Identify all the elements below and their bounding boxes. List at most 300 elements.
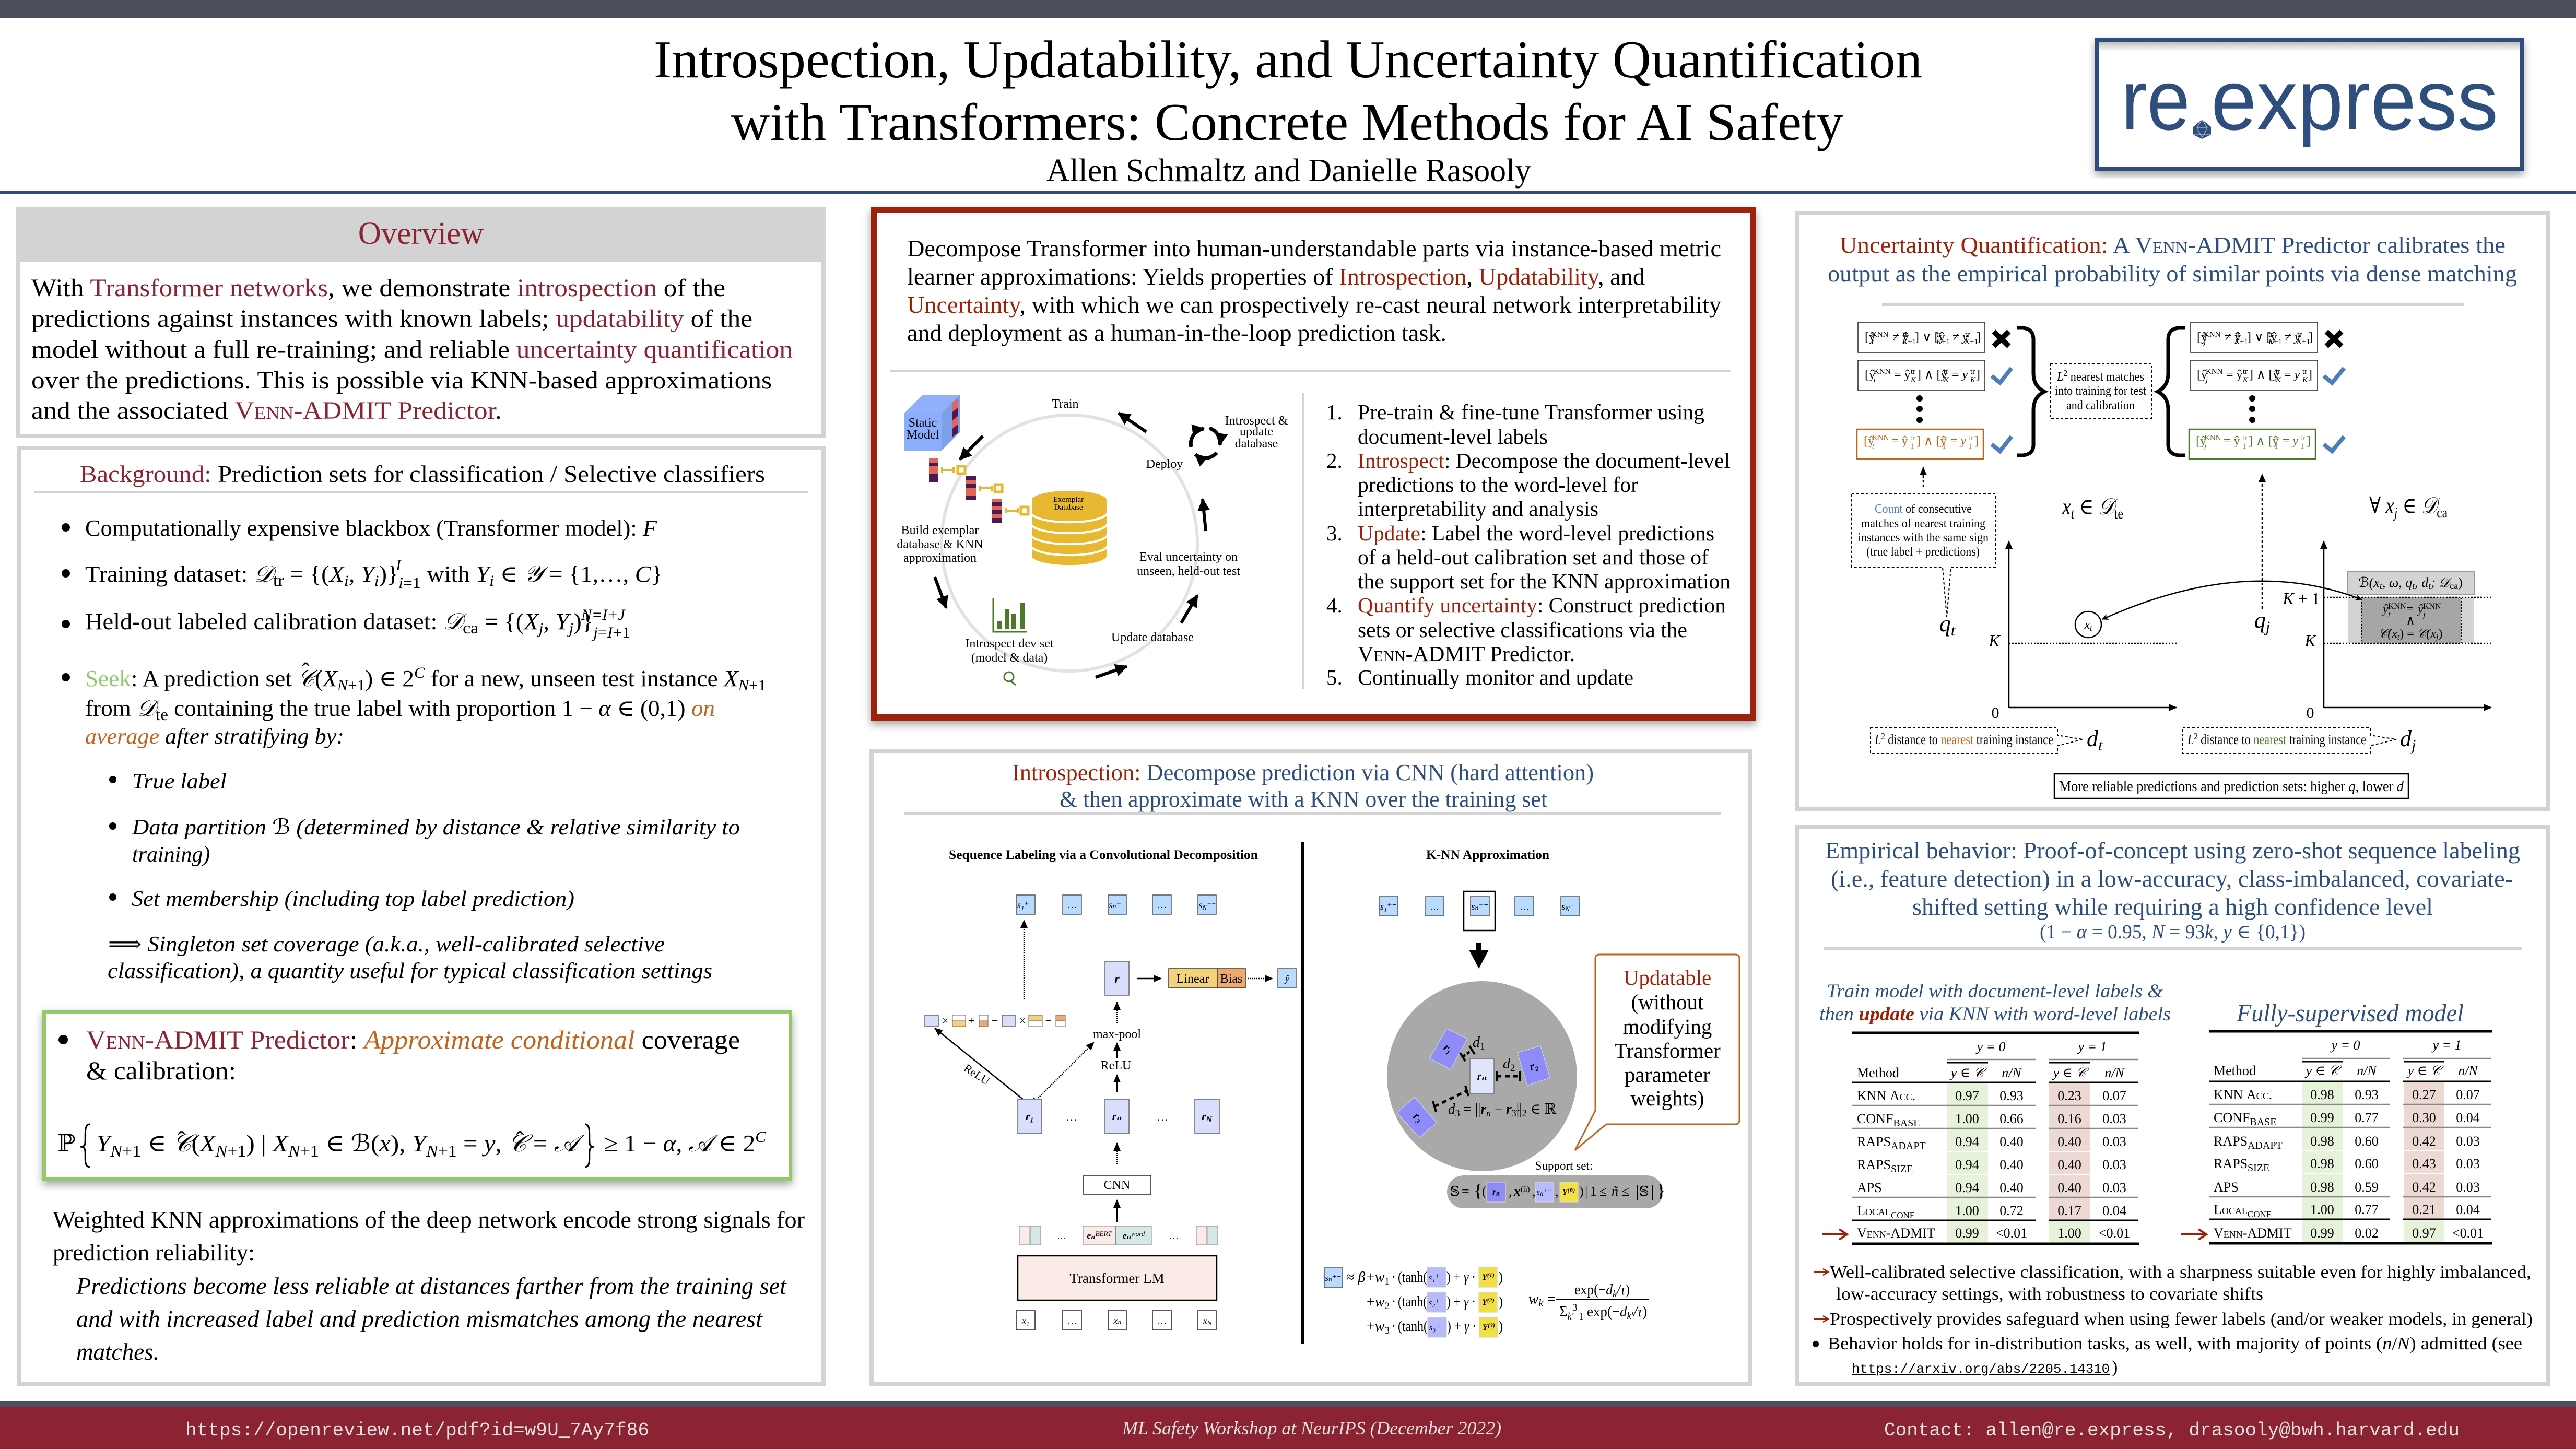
table: fully supervised: 0.43: [2412, 1156, 2436, 1171]
approximation equation: (2): [1487, 1297, 1495, 1304]
background bullets: = {(: [284, 561, 330, 587]
numbered list: of a held-out calibration set and those of: [1358, 545, 1709, 569]
partition conditions: 𝒞(x: [2379, 627, 2397, 641]
calibration-side match boxes: 1: [2274, 442, 2278, 451]
table: document-level: 0.23: [2057, 1088, 2081, 1103]
hidden representations: rₙ: [1112, 1110, 1122, 1123]
test-side match boxes: tr: [1965, 331, 1970, 339]
right chart: K: [2304, 631, 2316, 650]
arrows: [935, 920, 1273, 1222]
empirical heading: (i.e., feature detection) in a low-accuracy, class-imbalanced, covariate-: [1831, 865, 2513, 892]
table: fully supervised: y = 1: [2431, 1038, 2462, 1053]
arrow: left table highlight: [1822, 1229, 1847, 1240]
test-side match boxes: tr: [1910, 434, 1915, 442]
output scores: [1016, 895, 1216, 914]
embeddings: [1019, 1226, 1218, 1245]
distance note right: j: [2409, 737, 2416, 754]
formula: ≥ 1 − α, 𝒜 ∈ 2: [604, 1130, 754, 1157]
support set formula: 1: [1590, 1184, 1597, 1199]
background bullets: Y: [476, 561, 492, 587]
table: fully supervised: 0.60: [2355, 1156, 2379, 1171]
numbered list: Update: Label the word-level predictions: [1358, 521, 1714, 545]
approximation equation: (tanh(: [1398, 1294, 1427, 1310]
summary text: Decompose Transformer into human-understandable parts via instance-based metric: [907, 235, 1721, 262]
cycle labels: Introspect &: [1225, 414, 1288, 428]
weight formula: d: [1620, 1303, 1627, 1320]
background bullets: α ∈ (0,1) on: [598, 696, 714, 721]
callout: updatable: modifying: [1623, 1015, 1712, 1039]
calibration-side match boxes: ] ∨ [ŷ: [2247, 331, 2277, 344]
uncertainty heading: [1828, 232, 2517, 287]
output scores: …: [1067, 900, 1077, 910]
test-side match boxes: ≠: [1949, 331, 1962, 344]
summary text: learner approximations: Yields properties of Introspection, Updatability, and: [907, 263, 1645, 290]
approximation equation: +w: [1367, 1269, 1384, 1286]
cycle labels: database: [1235, 437, 1278, 451]
table: document-level: 0.17: [2057, 1203, 2081, 1218]
empirical heading: Empirical behavior: Proof-of-concept using zero-shot sequence labeling: [1825, 837, 2520, 864]
numbered list: Pre-train & fine-tune Transformer using: [1358, 400, 1704, 424]
KNN reliability text: prediction reliability:: [53, 1239, 255, 1266]
distance labels: r: [1480, 1101, 1487, 1117]
table: document-level: <0.01: [2099, 1226, 2130, 1241]
right table subtitle: Fully-supervised model: [2236, 999, 2464, 1027]
calibration-side match boxes: tr: [2268, 331, 2273, 339]
approximation equation: ·: [1391, 1269, 1396, 1286]
decomposition terms: −: [1045, 1014, 1052, 1027]
calibration-side match boxes: KNN: [2204, 434, 2221, 442]
approximation equation: Y: [1483, 1323, 1488, 1332]
hidden representations: r: [1202, 1110, 1206, 1123]
table: document-level: SIZE: [1891, 1163, 1913, 1175]
distance note right: d: [2400, 726, 2412, 751]
distance note left: 2: [1881, 731, 1885, 741]
introspection heading: & then approximate with a KNN over the training set: [1060, 786, 1547, 812]
formula: 𝒞(X: [173, 1130, 215, 1157]
callout: updatable: (without: [1631, 990, 1704, 1014]
icon: exemplar database: Database: [1054, 503, 1083, 512]
table: fully supervised: Venn-ADMIT: [2214, 1226, 2292, 1241]
cycle labels: Update database: [1111, 631, 1194, 644]
hidden representations: N: [1205, 1115, 1213, 1124]
formula: ˆ: [516, 1126, 524, 1153]
table: fully supervised: APS: [2214, 1180, 2239, 1195]
sub-bullets: True label: [132, 770, 227, 794]
numbered list: 4.: [1326, 593, 1343, 617]
table: fully supervised: RAPS: [2214, 1134, 2248, 1149]
approximation equation: sₙ⁺⁻: [1325, 1273, 1342, 1283]
partition box: ℬ(x: [2358, 575, 2380, 590]
distance labels: 2: [1522, 1108, 1527, 1119]
L2 matches note: 2: [2063, 368, 2067, 378]
partition box: t: [2380, 581, 2383, 591]
cycle labels: update: [1240, 425, 1273, 439]
table: fully supervised: 0.03: [2456, 1156, 2480, 1171]
support set formula: |: [1636, 1182, 1639, 1200]
table: fully supervised: ADAPT: [2248, 1140, 2283, 1151]
support set formula: ): [1579, 1184, 1584, 1199]
background bullets: )}: [573, 609, 593, 634]
embeddings: …: [1169, 1230, 1179, 1241]
weight formula: Σ: [1559, 1303, 1568, 1320]
ReLU arrow label: ReLU: [961, 1061, 992, 1088]
test-side match boxes: [1857, 322, 1985, 459]
distance labels: = ||: [1460, 1101, 1480, 1117]
table: fully supervised: 0.98: [2310, 1156, 2334, 1171]
table: fully supervised: 0.77: [2355, 1202, 2379, 1217]
table: document-level: y = 0: [1975, 1039, 2006, 1054]
calibration-side match boxes: ]: [2308, 368, 2312, 382]
distance labels: −: [1491, 1101, 1506, 1117]
cycle labels: unseen, held-out test: [1137, 564, 1240, 578]
background bullets: Seek: A prediction set 𝒞(X: [85, 666, 337, 691]
background bullets: ,: [543, 609, 556, 634]
calibration-side match boxes: ]: [2309, 331, 2313, 344]
left chart: 0: [1992, 704, 1999, 722]
calibration-side match boxes: K: [2302, 376, 2308, 384]
header: [654, 30, 2522, 189]
table: fully supervised: 0.04: [2456, 1202, 2480, 1217]
test-side match boxes: =: [1952, 368, 1962, 382]
table: fully supervised: 0.93: [2355, 1087, 2379, 1102]
q and domain labels: j: [2264, 618, 2270, 635]
linear and bias: [1114, 969, 1245, 988]
formula: ) |: [246, 1130, 273, 1157]
numbered list: Quantify uncertainty: Construct prediction: [1358, 593, 1726, 617]
calibration-side match boxes: K: [2296, 338, 2302, 346]
calibration-side match boxes: tr: [2300, 434, 2305, 442]
table: fully supervised: 0.21: [2412, 1202, 2436, 1217]
icon: magnifier: [1004, 672, 1016, 685]
calibration-side match boxes: j: [2205, 376, 2208, 384]
test-side match boxes: ]: [1977, 331, 1981, 344]
table: fully supervised: y = 0: [2330, 1038, 2360, 1053]
test-side match boxes: [ŷ: [1864, 434, 1874, 448]
score row: N: [1565, 905, 1570, 913]
overview heading: Overview: [358, 216, 484, 251]
support set formula: ,: [1532, 1184, 1535, 1199]
cycle labels: Introspect dev set: [965, 637, 1054, 651]
approximation equation: (tanh(: [1398, 1318, 1428, 1335]
background bullets: from 𝒟: [85, 696, 155, 721]
table: fully supervised: 0.02: [2355, 1226, 2379, 1241]
panel: empirical behavior: [1797, 827, 2548, 1384]
calibration-side match boxes: =: [2283, 434, 2293, 448]
top bar: [0, 0, 2576, 18]
background bullets: tr: [273, 571, 284, 590]
test-side match boxes: KNN: [1872, 434, 1889, 442]
table: fully supervised: BASE: [2250, 1116, 2276, 1128]
CNN box: CNN: [1104, 1179, 1130, 1192]
distance note right: L: [2187, 732, 2194, 747]
panel: uncertainty quantification: [1797, 213, 2548, 809]
table: document-level: n/N: [2104, 1065, 2125, 1080]
support set label: Support set:: [1535, 1159, 1593, 1172]
KNN reliability text: Predictions become less reliable at distances farther from the training set: [76, 1273, 787, 1299]
formula: +1: [438, 1141, 457, 1160]
icons: cross marks and checks: [1992, 332, 2344, 451]
count note: matches of nearest training: [1861, 517, 1985, 531]
background bullets: for a new, unseen test instance: [425, 666, 724, 691]
table: document-level: 0.03: [2102, 1180, 2126, 1195]
q and domain labels: ca: [2437, 505, 2448, 521]
support set formula: Y: [1562, 1188, 1568, 1197]
partition conditions: ∧: [2406, 614, 2415, 628]
calibration-side match boxes: [2189, 322, 2318, 459]
icon: static model cube: [904, 395, 960, 451]
left table subtitle: [1819, 981, 2171, 1025]
overview text: over the predictions. This is possible via KNN-based approximations: [31, 367, 772, 394]
approximation equation: 1: [1384, 1276, 1390, 1287]
score row: +−: [1570, 901, 1579, 909]
background bullets: +1: [348, 677, 365, 694]
cycle labels: Train: [1052, 397, 1079, 411]
table: document-level: 0.40: [1999, 1157, 2024, 1172]
representation r_n: rₙ: [1477, 1069, 1487, 1082]
L2 matches note: into training for test: [2055, 384, 2146, 398]
q and domain labels: te: [2114, 506, 2123, 522]
introspection heading: [1012, 760, 1594, 812]
partition conditions: j: [2435, 633, 2439, 642]
table: document-level: 0.94: [1955, 1180, 1979, 1195]
numbered list: Continually monitor and update: [1358, 665, 1633, 689]
count note: (true label + predictions): [1866, 545, 1980, 559]
output scores: s₁⁺⁻: [1017, 900, 1034, 910]
calibration-side match boxes: ] ∧ [ŷ: [2249, 434, 2279, 448]
linear and bias: Linear: [1177, 972, 1209, 986]
calibration-side match boxes: tr: [2276, 368, 2280, 376]
distance labels: r: [1506, 1101, 1512, 1117]
distance note left: distance to: [1885, 732, 1940, 747]
table: fully supervised: 0.42: [2412, 1180, 2436, 1195]
calibration-side match boxes: y: [2293, 368, 2300, 382]
findings bullets: https://arxiv.org/abs/2205.14310: [1852, 1361, 2110, 1377]
icon: refresh cycle: [1191, 428, 1220, 458]
table: document-level: 0.40: [1999, 1134, 2024, 1149]
table: fully supervised: y ∈ 𝒞: [2304, 1063, 2342, 1078]
q and domain labels: t: [2071, 506, 2075, 522]
callout: updatable: Updatable: [1624, 965, 1711, 989]
approximation equation: s₃⁺⁻: [1429, 1323, 1445, 1333]
summary text: Uncertainty, with which we can prospectively re-cast neural network interpretability: [907, 291, 1721, 318]
L2 matches note: L: [2056, 370, 2063, 384]
overview text: and the associated Venn-ADMIT Predictor .: [31, 397, 502, 425]
test-side match boxes: t: [1872, 442, 1875, 451]
introspection heading: Introspection: Decompose prediction via CNN (hard attention): [1012, 760, 1594, 785]
L2 matches note: [2050, 363, 2151, 418]
table: fully supervised: y ∈ 𝒞: [2406, 1063, 2444, 1078]
test-side match boxes: K: [1936, 338, 1942, 346]
test-side match boxes: +1: [1970, 338, 1978, 346]
y-hat box: [1278, 969, 1296, 988]
calibration-side match boxes: KNN: [2204, 331, 2221, 339]
test-side match boxes: 1: [1910, 442, 1914, 451]
support set formula: (ñ): [1521, 1185, 1530, 1194]
weight formula: /τ: [1632, 1303, 1643, 1320]
calibration-side match boxes: ≠: [2281, 331, 2295, 344]
header rule: [0, 191, 2576, 194]
partition box: t: [2428, 581, 2431, 591]
approximation equation: ) + γ ·: [1446, 1294, 1476, 1310]
distance labels: n: [1486, 1108, 1491, 1119]
q and domain labels: q: [2254, 607, 2266, 633]
test-side match boxes: [ŷ: [1865, 331, 1875, 344]
cycle labels: Build exemplar: [901, 524, 979, 537]
approximation equation: s₂⁺⁻: [1429, 1298, 1444, 1307]
heading rule: [904, 812, 1721, 815]
support set circle: [1387, 981, 1577, 1171]
distance labels: 2: [1510, 1063, 1515, 1074]
background bullets: )}: [379, 561, 398, 587]
table: document-level: 0.72: [1999, 1203, 2024, 1218]
table: document-level: Local: [1857, 1203, 1891, 1218]
table: document-level: 0.16: [2057, 1111, 2081, 1126]
table: document-level: RAPS: [1857, 1157, 1891, 1172]
calibration-side match boxes: ] ∧ [ŷ: [2249, 368, 2279, 382]
table: document-level: Method: [1857, 1065, 1899, 1080]
test-side match boxes: KNN: [1872, 331, 1889, 339]
callout: Venn-ADMIT predictor: & calibration:: [86, 1056, 236, 1085]
calibration-side match boxes: j: [2203, 338, 2206, 346]
left chart: K: [1988, 631, 2001, 650]
numbered list: the support set for the KNN approximation: [1358, 569, 1731, 593]
overview text: predictions against instances with known labels; updatability of the: [31, 305, 752, 333]
table: document-level: 0.03: [2102, 1157, 2126, 1172]
approximation equation: ·: [1391, 1318, 1396, 1335]
table: document-level: y = 1: [2076, 1039, 2107, 1054]
numbered list: 5.: [1326, 665, 1343, 689]
callout: updatable: [1575, 955, 1739, 1150]
overview header band: [16, 207, 826, 262]
distance labels: d: [1473, 1034, 1480, 1051]
support set formula: ñ: [1612, 1184, 1618, 1199]
formula: X: [272, 1130, 289, 1157]
table: fully supervised: Method: [2214, 1063, 2256, 1078]
authors: Allen Schmaltz and Danielle Rasooly: [1046, 153, 1531, 189]
calibration-side match boxes: [ŷ: [2197, 368, 2207, 382]
formula: y, 𝒞 = 𝒜: [484, 1130, 577, 1157]
embeddings: eₙ: [1087, 1230, 1096, 1241]
output scores: +−: [1207, 900, 1216, 908]
background bullets: ca: [463, 618, 478, 637]
input tokens: x: [1203, 1315, 1207, 1326]
right chart: 0: [2306, 704, 2314, 722]
support set formula: x: [1513, 1184, 1521, 1199]
panel: introspection: [872, 751, 1750, 1384]
table: document-level: APS: [1857, 1180, 1882, 1195]
calibration-side match boxes: K: [2234, 338, 2240, 346]
cycle labels: [897, 397, 1288, 665]
diagram: KNN approximation: [1324, 848, 1739, 1337]
logo: re.express: express: [2211, 52, 2498, 148]
embeddings: eₙ: [1123, 1230, 1131, 1241]
partition conditions: ŷ: [2383, 603, 2389, 616]
input tokens: N: [1207, 1319, 1213, 1327]
input tokens: [1016, 1311, 1216, 1330]
test point: t: [2090, 624, 2092, 633]
icon: static model cube: Model: [907, 428, 939, 442]
r box: [1105, 961, 1129, 995]
support set formula: s: [1537, 1188, 1540, 1197]
approximation equation: (tanh(: [1398, 1269, 1427, 1286]
background bullets: Y: [556, 609, 571, 634]
test point: [2075, 611, 2101, 638]
test-side match boxes: ]: [1974, 434, 1979, 448]
partition conditions: KNN: [2388, 602, 2406, 611]
distance labels: ||: [1516, 1101, 1522, 1117]
linear and bias: Bias: [1220, 972, 1242, 986]
calibration-side match boxes: y: [2293, 331, 2300, 344]
formula: +1: [300, 1141, 319, 1160]
formula: ℬ(x), Y: [350, 1130, 425, 1157]
table: document-level: 0.40: [2057, 1157, 2081, 1172]
table: fully supervised: 0.07: [2456, 1087, 2480, 1102]
table: document-level: n/N: [2002, 1065, 2022, 1080]
background bullets: C: [414, 664, 426, 681]
partition conditions: j: [2422, 610, 2426, 619]
formula: Y: [96, 1130, 113, 1157]
table: document-level: 1.00: [1955, 1203, 1979, 1218]
table: document-level: [1852, 1033, 2139, 1244]
distance note left: L: [1874, 732, 1881, 747]
table: fully supervised: 0.97: [2412, 1226, 2436, 1241]
background bullets: Training dataset: 𝒟: [85, 561, 272, 587]
heading rule: [1882, 303, 2464, 306]
table: fully supervised: [2209, 1031, 2492, 1243]
uncertainty heading: output as the empirical probability of similar points via dense matching: [1828, 261, 2517, 287]
distance labels: 1: [1480, 1041, 1485, 1052]
hidden representations: …: [1157, 1110, 1168, 1123]
decomposition terms: [925, 1014, 1065, 1027]
table: document-level: y ∈ 𝒞: [2052, 1065, 2089, 1080]
distance labels: 3: [1455, 1108, 1460, 1119]
background bullets: N: [738, 677, 750, 694]
q and domain labels: x: [2062, 494, 2071, 520]
weight formula: exp(−d: [1574, 1281, 1614, 1298]
approximation equation: [1324, 1267, 1503, 1337]
test-side match boxes: ]: [1976, 368, 1980, 382]
output scores: s: [1198, 900, 1202, 910]
count note: [1852, 494, 1995, 617]
support set formula: 𝕊: [1450, 1184, 1460, 1199]
distance labels: [1448, 1034, 1557, 1119]
approximation equation: Y: [1482, 1298, 1487, 1307]
test-side match boxes: K: [1970, 376, 1976, 384]
down arrow: [1469, 943, 1489, 969]
cycle labels: (model & data): [971, 651, 1048, 665]
calibration-side match boxes: KNN: [2206, 368, 2223, 376]
table: document-level: ADAPT: [1891, 1140, 1926, 1152]
table: fully supervised: 0.30: [2412, 1110, 2436, 1125]
score row: [1379, 891, 1580, 930]
background bullets: ,: [349, 561, 361, 587]
neighbours: r₁: [1441, 1041, 1456, 1056]
test-side match boxes: +1: [1942, 338, 1950, 346]
sub-bullets: Set membership (including top label prediction): [132, 887, 574, 911]
support set formula: 𝕊: [1639, 1184, 1649, 1199]
column divider: [1301, 842, 1304, 1344]
distance note left: [1871, 726, 2103, 754]
table: fully supervised: 0.42: [2412, 1134, 2436, 1149]
left table subtitle: Train model with document-level labels &: [1827, 981, 2163, 1002]
weight formula: k′: [1627, 1310, 1633, 1322]
KNN reliability text: Weighted KNN approximations of the deep network encode strong signals for: [53, 1206, 805, 1233]
table: document-level: KNN Acc.: [1857, 1088, 1915, 1103]
approximation equation: ): [1498, 1318, 1503, 1335]
title: [654, 30, 1922, 152]
weight formula: /τ: [1616, 1281, 1626, 1298]
test-side match boxes: 1: [1942, 442, 1946, 451]
